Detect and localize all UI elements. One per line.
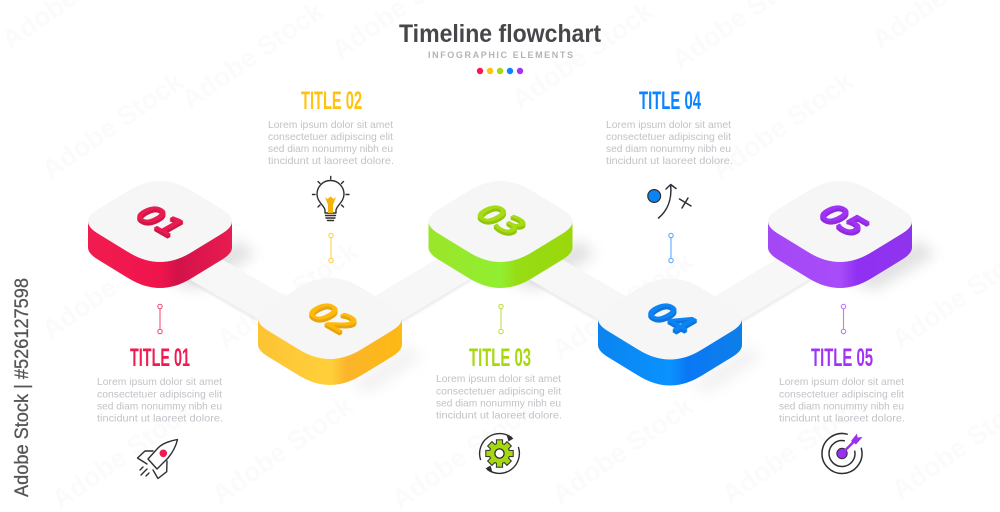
number 05: 05: [808, 200, 878, 240]
heading 04: TITLE 04: [639, 87, 701, 115]
stock watermark pattern: Adobe Stock: [546, 245, 699, 365]
icon: gear with cycle arrows: [480, 434, 519, 473]
body 04: consectetuer adipiscing elit: [606, 131, 731, 143]
step block 03: [428, 181, 572, 288]
body 02: tincidunt ut laoreet dolore.: [268, 155, 394, 167]
heading: [399, 20, 602, 74]
body 05: sed diam nonummy nibh eu: [779, 400, 904, 412]
text block 04: [606, 87, 733, 167]
stock watermark pattern: Adobe Stock: [206, 390, 359, 510]
connector band shadows: [185, 278, 813, 321]
icon: tactic arrow: [648, 184, 691, 218]
number 04: 04: [636, 298, 706, 338]
step block 01: [88, 181, 232, 288]
stock watermark pattern: Adobe Stock: [386, 395, 539, 512]
body 05: Lorem ipsum dolor sit amet: [779, 376, 904, 388]
text block 02: [268, 87, 394, 167]
body 05: tincidunt ut laoreet dolore.: [779, 412, 905, 424]
body 03: sed diam nonummy nibh eu: [436, 398, 561, 410]
body 02: sed diam nonummy nibh eu: [268, 143, 393, 155]
stock watermark pattern: Adobe Stock: [716, 390, 869, 510]
body 02: Lorem ipsum dolor sit amet: [268, 119, 393, 131]
text block 03: [436, 344, 562, 422]
icon: target with dart: [822, 434, 862, 474]
upper block shadows: [170, 240, 935, 290]
connector: 01 to 02: [185, 257, 310, 318]
body 01: [97, 376, 223, 424]
body 01: tincidunt ut laoreet dolore.: [97, 412, 223, 424]
subtitle: INFOGRAPHIC ELEMENTS: [428, 50, 573, 60]
title: Timeline flowchart: [399, 20, 602, 48]
side credit: Adobe Stock | #526127598: [12, 278, 33, 497]
number 02: 02: [297, 298, 367, 338]
stock watermark pattern: Adobe Stock: [36, 225, 189, 345]
body 01: sed diam nonummy nibh eu: [97, 400, 222, 412]
body 03: Lorem ipsum dolor sit amet: [436, 373, 561, 385]
connector: 03 to 04: [525, 257, 650, 318]
icon: rocket: [138, 440, 178, 478]
colour dots: [477, 68, 523, 74]
heading 05: TITLE 05: [811, 344, 873, 372]
connector: 04 to 05: [700, 257, 813, 320]
body 05: [779, 376, 905, 424]
icon: light bulb: [312, 176, 349, 220]
pin 02: [329, 233, 333, 263]
step block 02: [258, 278, 402, 385]
step block 05: [768, 181, 912, 288]
stock watermark pattern: Adobe Stock: [46, 395, 199, 512]
body 04: sed diam nonummy nibh eu: [606, 143, 731, 155]
body 01: consectetuer adipiscing elit: [97, 388, 222, 400]
number 01: 01: [125, 201, 195, 241]
heading 01: TITLE 01: [130, 344, 190, 372]
body 01: Lorem ipsum dolor sit amet: [97, 376, 222, 388]
stock watermark pattern: Adobe Stock: [36, 65, 189, 185]
body 02: [268, 119, 394, 167]
stock watermark pattern: Adobe Stock: [546, 390, 699, 510]
body 04: tincidunt ut laoreet dolore.: [606, 155, 733, 167]
heading 03: TITLE 03: [469, 344, 531, 372]
number 03: 03: [466, 200, 535, 240]
pin 01: [158, 304, 162, 334]
body 04: Lorem ipsum dolor sit amet: [606, 119, 731, 131]
body 03: consectetuer adipiscing elit: [436, 386, 561, 398]
body 03: tincidunt ut laoreet dolore.: [436, 410, 562, 422]
body 03: [436, 373, 562, 422]
lower block shadows: [350, 345, 760, 392]
text block 05: [779, 344, 905, 424]
pin 05: [841, 304, 846, 334]
body 05: consectetuer adipiscing elit: [779, 388, 904, 400]
step block 04: [598, 278, 742, 386]
body 04: [606, 119, 733, 167]
heading 02: TITLE 02: [301, 87, 362, 115]
pin 03: [499, 304, 503, 334]
text block 01: [97, 344, 223, 424]
pin 04: [669, 233, 673, 263]
connector: 02 to 03: [360, 257, 473, 320]
stock watermark pattern: Adobe Stock: [211, 235, 364, 355]
body 02: consectetuer adipiscing elit: [268, 131, 393, 143]
stock watermark pattern: Adobe Stock: [706, 65, 859, 185]
